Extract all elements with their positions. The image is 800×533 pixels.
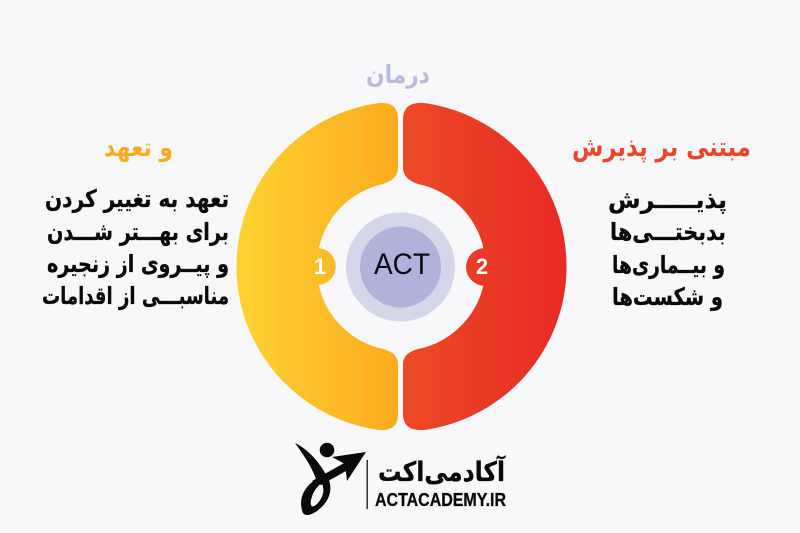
heading: acceptance: مبتنی بر پذیرش [572,132,751,163]
icon: running figure with arrow [295,443,366,515]
title: درمان [366,60,430,89]
text block: commitment: برای بهـــتر شـــدن [47,218,229,246]
text block: acceptance: و بیــماری‌ها [612,251,725,279]
text block: acceptance: و شکست‌ها [612,283,723,311]
text block: acceptance: پذیـــــرش [608,186,727,214]
heading: commitment: و تعهد [104,133,173,163]
text block: commitment: مناسبـــی از اقدامات [42,282,229,310]
logo wordmark: آکادمی‌اکت [378,455,506,488]
number 2: 2 [476,254,488,279]
ring segment 1: yellow [236,103,398,430]
text block: acceptance [608,186,727,311]
logo [295,443,506,515]
center hub: ACT: ACT [374,248,430,281]
text block: commitment: و پیــروی از زنجیره [47,250,229,278]
panel: acceptance [572,132,751,311]
text block: commitment [42,185,229,310]
divider [366,460,368,509]
center hub: ACT [346,212,455,322]
text block: acceptance: بدبختـــی‌ها [610,218,726,246]
number 1: 1 [314,254,326,279]
logo url: ACTACADEMY.IR [375,490,506,510]
text block: commitment: تعهد به تغییر کردن [45,185,229,213]
panel: commitment [42,133,229,310]
ring segment 2: red [403,103,567,430]
